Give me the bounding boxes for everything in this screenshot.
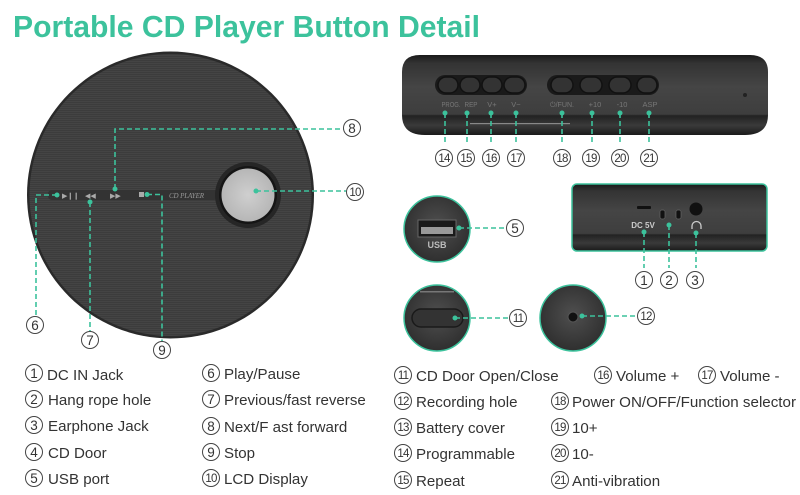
jack <box>743 93 747 97</box>
control strip: ▶▶ <box>110 193 121 200</box>
item 1 <box>26 364 124 384</box>
button labels: ⏻/FUN. <box>550 100 574 109</box>
item 8: Next/F ast forward <box>224 419 347 436</box>
item 21: 21 <box>554 475 566 487</box>
item 2: Hang rope hole <box>48 392 151 409</box>
callout 20 <box>612 110 628 166</box>
button labels: -10 <box>617 100 627 109</box>
callout 18: 18 <box>556 153 568 165</box>
item 21: Anti-vibration <box>572 473 660 490</box>
legend column 3 <box>394 366 559 490</box>
item 13: Battery cover <box>416 420 505 437</box>
control strip: ▶❙❙ <box>62 192 79 200</box>
item 10: LCD Display <box>224 471 308 488</box>
callout 3: 3 <box>691 273 699 288</box>
item 1: 1 <box>30 366 38 381</box>
callout 17 <box>508 110 524 166</box>
callout 17: 17 <box>510 153 522 165</box>
callout 3 <box>686 230 704 288</box>
item 3: Earphone Jack <box>48 418 149 435</box>
callout 18 <box>554 110 570 166</box>
button labels: ASP <box>642 100 658 109</box>
item 12: Recording hole <box>416 394 518 411</box>
item 17: Volume - <box>720 368 780 385</box>
item 5: 5 <box>30 471 38 486</box>
item 20: 20 <box>554 448 566 460</box>
callout 11: 11 <box>513 313 524 325</box>
item 20: 10- <box>572 446 594 463</box>
callout 16: 16 <box>485 153 497 165</box>
callout 9 <box>144 192 170 358</box>
callout 10 <box>254 184 364 200</box>
item 1: DC IN Jack <box>47 367 124 384</box>
item 15: 15 <box>397 475 409 487</box>
item 9: Stop <box>224 445 255 462</box>
item 17: 17 <box>701 370 713 382</box>
callout 6 <box>26 192 60 334</box>
item 3: 3 <box>30 418 38 433</box>
button group right <box>547 75 659 95</box>
callout 15 <box>458 110 474 166</box>
control strip: ◀◀ <box>85 193 96 200</box>
rope holes <box>660 210 681 219</box>
button labels: V− <box>511 100 521 109</box>
item 14: 14 <box>397 448 410 460</box>
callout 19: 19 <box>585 153 597 165</box>
item 20 <box>552 444 594 463</box>
callout 16 <box>482 110 500 166</box>
panel: recording hole <box>540 285 654 351</box>
item 11: CD Door Open/Close <box>416 368 559 385</box>
player disc <box>27 52 314 338</box>
panel: player side buttons <box>402 55 768 166</box>
item 16: Volume + <box>616 368 680 385</box>
panel: CD door latch <box>404 285 526 351</box>
item 16: 16 <box>597 370 609 382</box>
callout 7 <box>82 200 98 348</box>
panel: USB port <box>404 196 524 262</box>
item 19: 19 <box>554 422 566 434</box>
item 5: USB port <box>48 471 110 488</box>
micro USB port <box>637 206 651 209</box>
callout 19 <box>582 110 600 166</box>
callout 7: 7 <box>86 333 94 348</box>
item 11: 11 <box>398 370 409 382</box>
button labels <box>442 100 658 109</box>
latch <box>412 309 463 327</box>
item 19 <box>552 418 598 437</box>
item 4: 4 <box>30 445 38 460</box>
callout 8 <box>112 120 360 192</box>
USB socket <box>418 220 456 237</box>
item 7: 7 <box>207 392 215 407</box>
callout 8: 8 <box>348 121 356 136</box>
callout 10: 10 <box>349 187 361 199</box>
item 15: Repeat <box>416 473 465 490</box>
item 8: 8 <box>207 419 215 434</box>
callout 12: 12 <box>640 311 652 323</box>
button labels: PROG. <box>442 100 460 109</box>
callout 14: 14 <box>438 153 451 165</box>
device body <box>402 55 768 135</box>
button group left <box>435 75 527 95</box>
panel: player top view <box>26 52 364 358</box>
callout 15: 15 <box>460 153 472 165</box>
item 6: 6 <box>207 366 215 381</box>
item 16 <box>594 366 680 385</box>
control strip <box>48 190 218 200</box>
callout 5: 5 <box>511 221 519 236</box>
panel: jacks <box>572 184 767 288</box>
item 2: 2 <box>30 392 38 407</box>
title: Portable CD Player Button Detail <box>13 9 480 44</box>
button labels: +10 <box>589 100 601 109</box>
button labels: REP <box>464 100 478 109</box>
callout 1: 1 <box>640 273 648 288</box>
item 14: Programmable <box>416 446 515 463</box>
callout 2 <box>660 222 678 288</box>
item 18: 18 <box>554 396 566 408</box>
USB label: USB <box>427 240 447 250</box>
item 4 <box>26 444 107 462</box>
item 10: 10 <box>205 473 217 485</box>
LCD display <box>215 162 281 228</box>
callout 6: 6 <box>31 318 39 333</box>
callout 21: 21 <box>643 153 655 165</box>
item 5 <box>26 470 110 488</box>
legend column 1 <box>26 364 151 488</box>
item 6: Play/Pause <box>224 366 300 383</box>
item 9 <box>202 444 255 462</box>
item 15 <box>394 472 465 490</box>
item 7: Previous/fast reverse <box>224 392 366 409</box>
item 19: 10+ <box>572 420 598 437</box>
item 9: 9 <box>207 445 215 460</box>
item 17 <box>698 366 780 385</box>
item 12: 12 <box>397 396 409 408</box>
door edge <box>420 291 454 292</box>
button labels: V+ <box>487 100 497 109</box>
hole <box>568 312 578 322</box>
legend column 2 <box>202 364 366 488</box>
callout 14 <box>436 110 452 166</box>
item 13: 13 <box>397 422 409 434</box>
highlight <box>470 123 570 124</box>
callout 21 <box>640 110 658 166</box>
callout 20: 20 <box>614 153 626 165</box>
earphone jack <box>690 202 702 216</box>
callout 9: 9 <box>158 343 166 358</box>
control strip: CD PLAYER <box>169 192 205 200</box>
item 4: CD Door <box>48 445 107 462</box>
callout 1 <box>636 230 652 288</box>
headphone icon <box>692 222 701 229</box>
legend column 4 <box>552 366 796 490</box>
item 18: Power ON/OFF/Function selector <box>572 394 796 411</box>
DC 5V label: DC 5V <box>631 221 655 230</box>
callout 2: 2 <box>665 273 673 288</box>
